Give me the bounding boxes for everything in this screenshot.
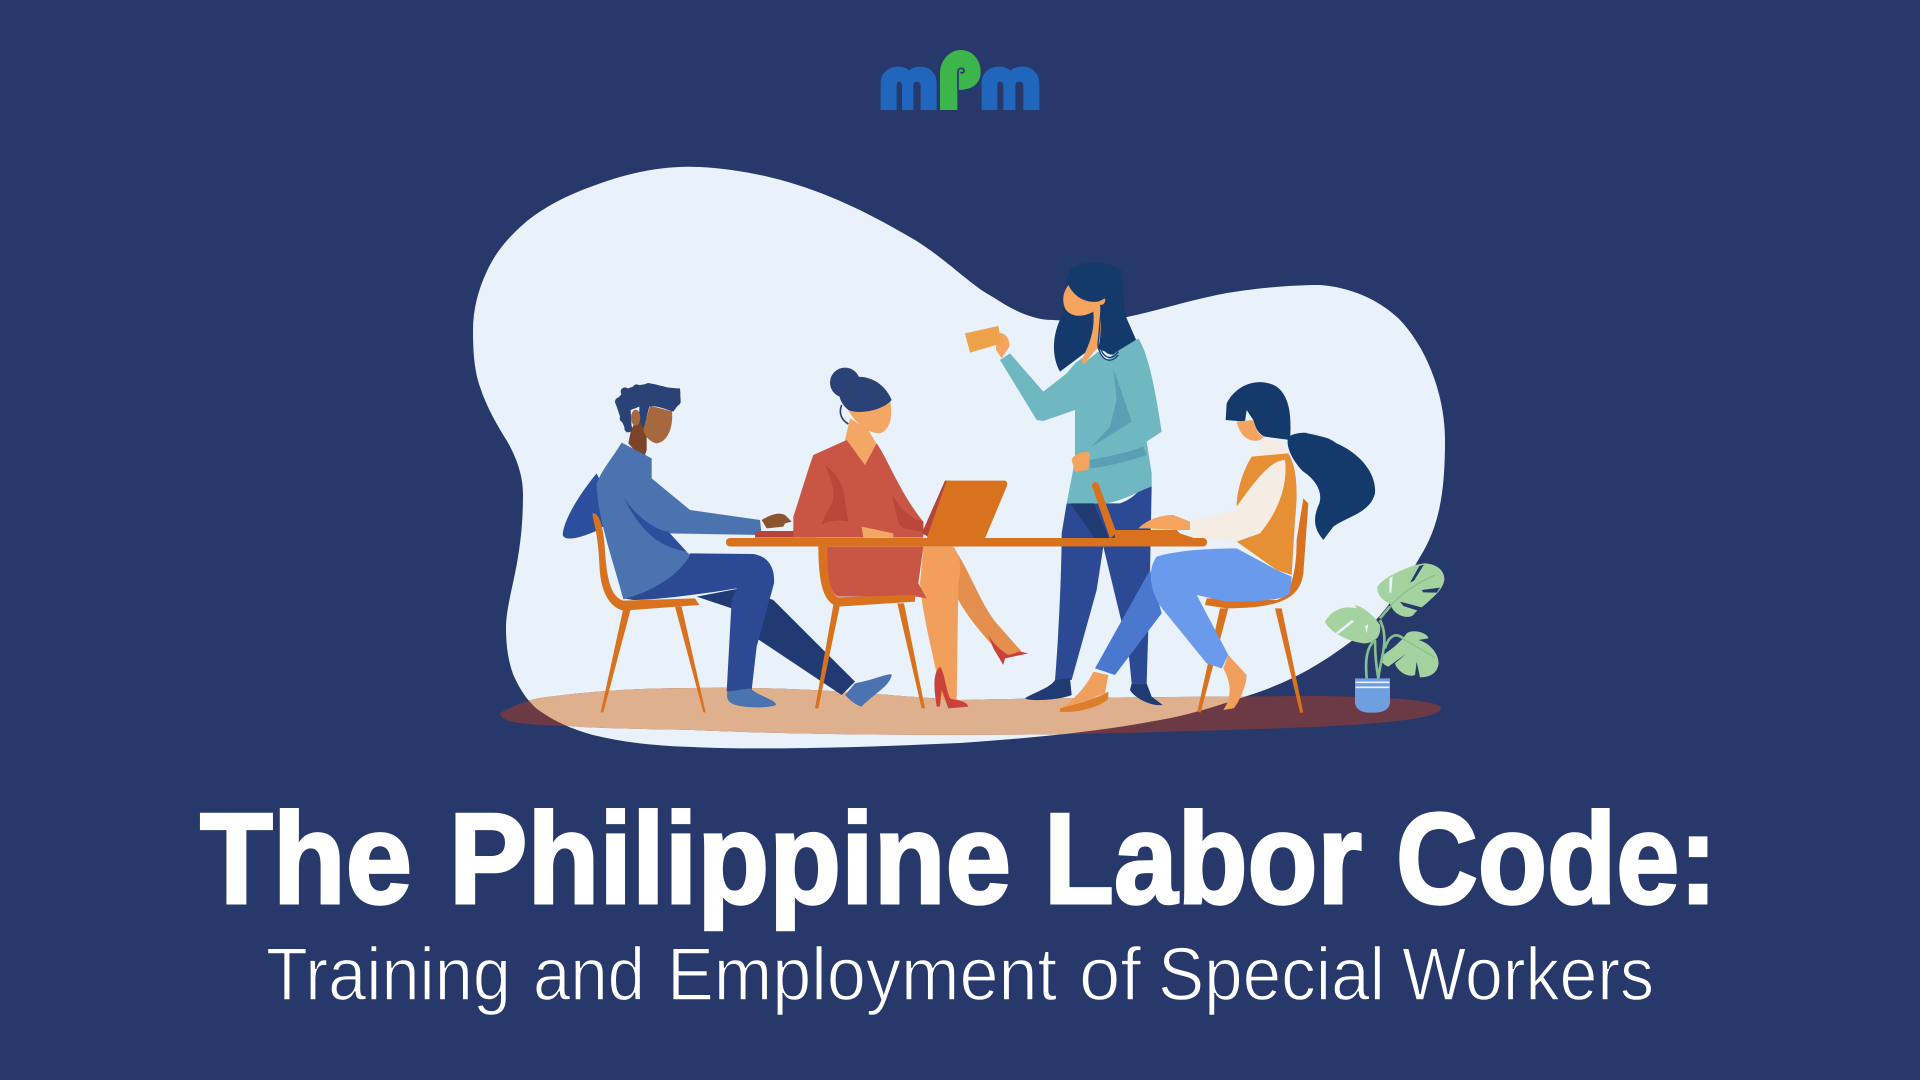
- logo: mPm: [881, 50, 1039, 110]
- subtitle: Training: [266, 932, 511, 1016]
- man's head and curly hair: [615, 383, 681, 443]
- person: man in blue shirt: [563, 410, 892, 712]
- title: [200, 787, 1717, 931]
- potted plant: [1325, 563, 1444, 713]
- title: Labor: [1044, 787, 1362, 931]
- person: woman in red dress with laptop: [755, 368, 1028, 708]
- title: Philippine: [449, 787, 1011, 931]
- infographic canvas: [200, 50, 1708, 1015]
- title: Code:: [1396, 787, 1717, 931]
- title: The: [200, 787, 412, 931]
- floor shadow: [500, 688, 1441, 735]
- person: seated woman with ponytail: [1060, 382, 1376, 713]
- subtitle: Special: [1158, 932, 1385, 1016]
- subtitle: Workers: [1402, 932, 1654, 1016]
- subtitle: [266, 932, 1654, 1016]
- person: standing woman with card: [965, 262, 1163, 705]
- subtitle: of: [1079, 932, 1141, 1016]
- subtitle: and: [533, 932, 645, 1016]
- table: [726, 538, 1207, 546]
- subtitle: Employment: [667, 932, 1057, 1016]
- illustration backdrop blob: [473, 167, 1445, 748]
